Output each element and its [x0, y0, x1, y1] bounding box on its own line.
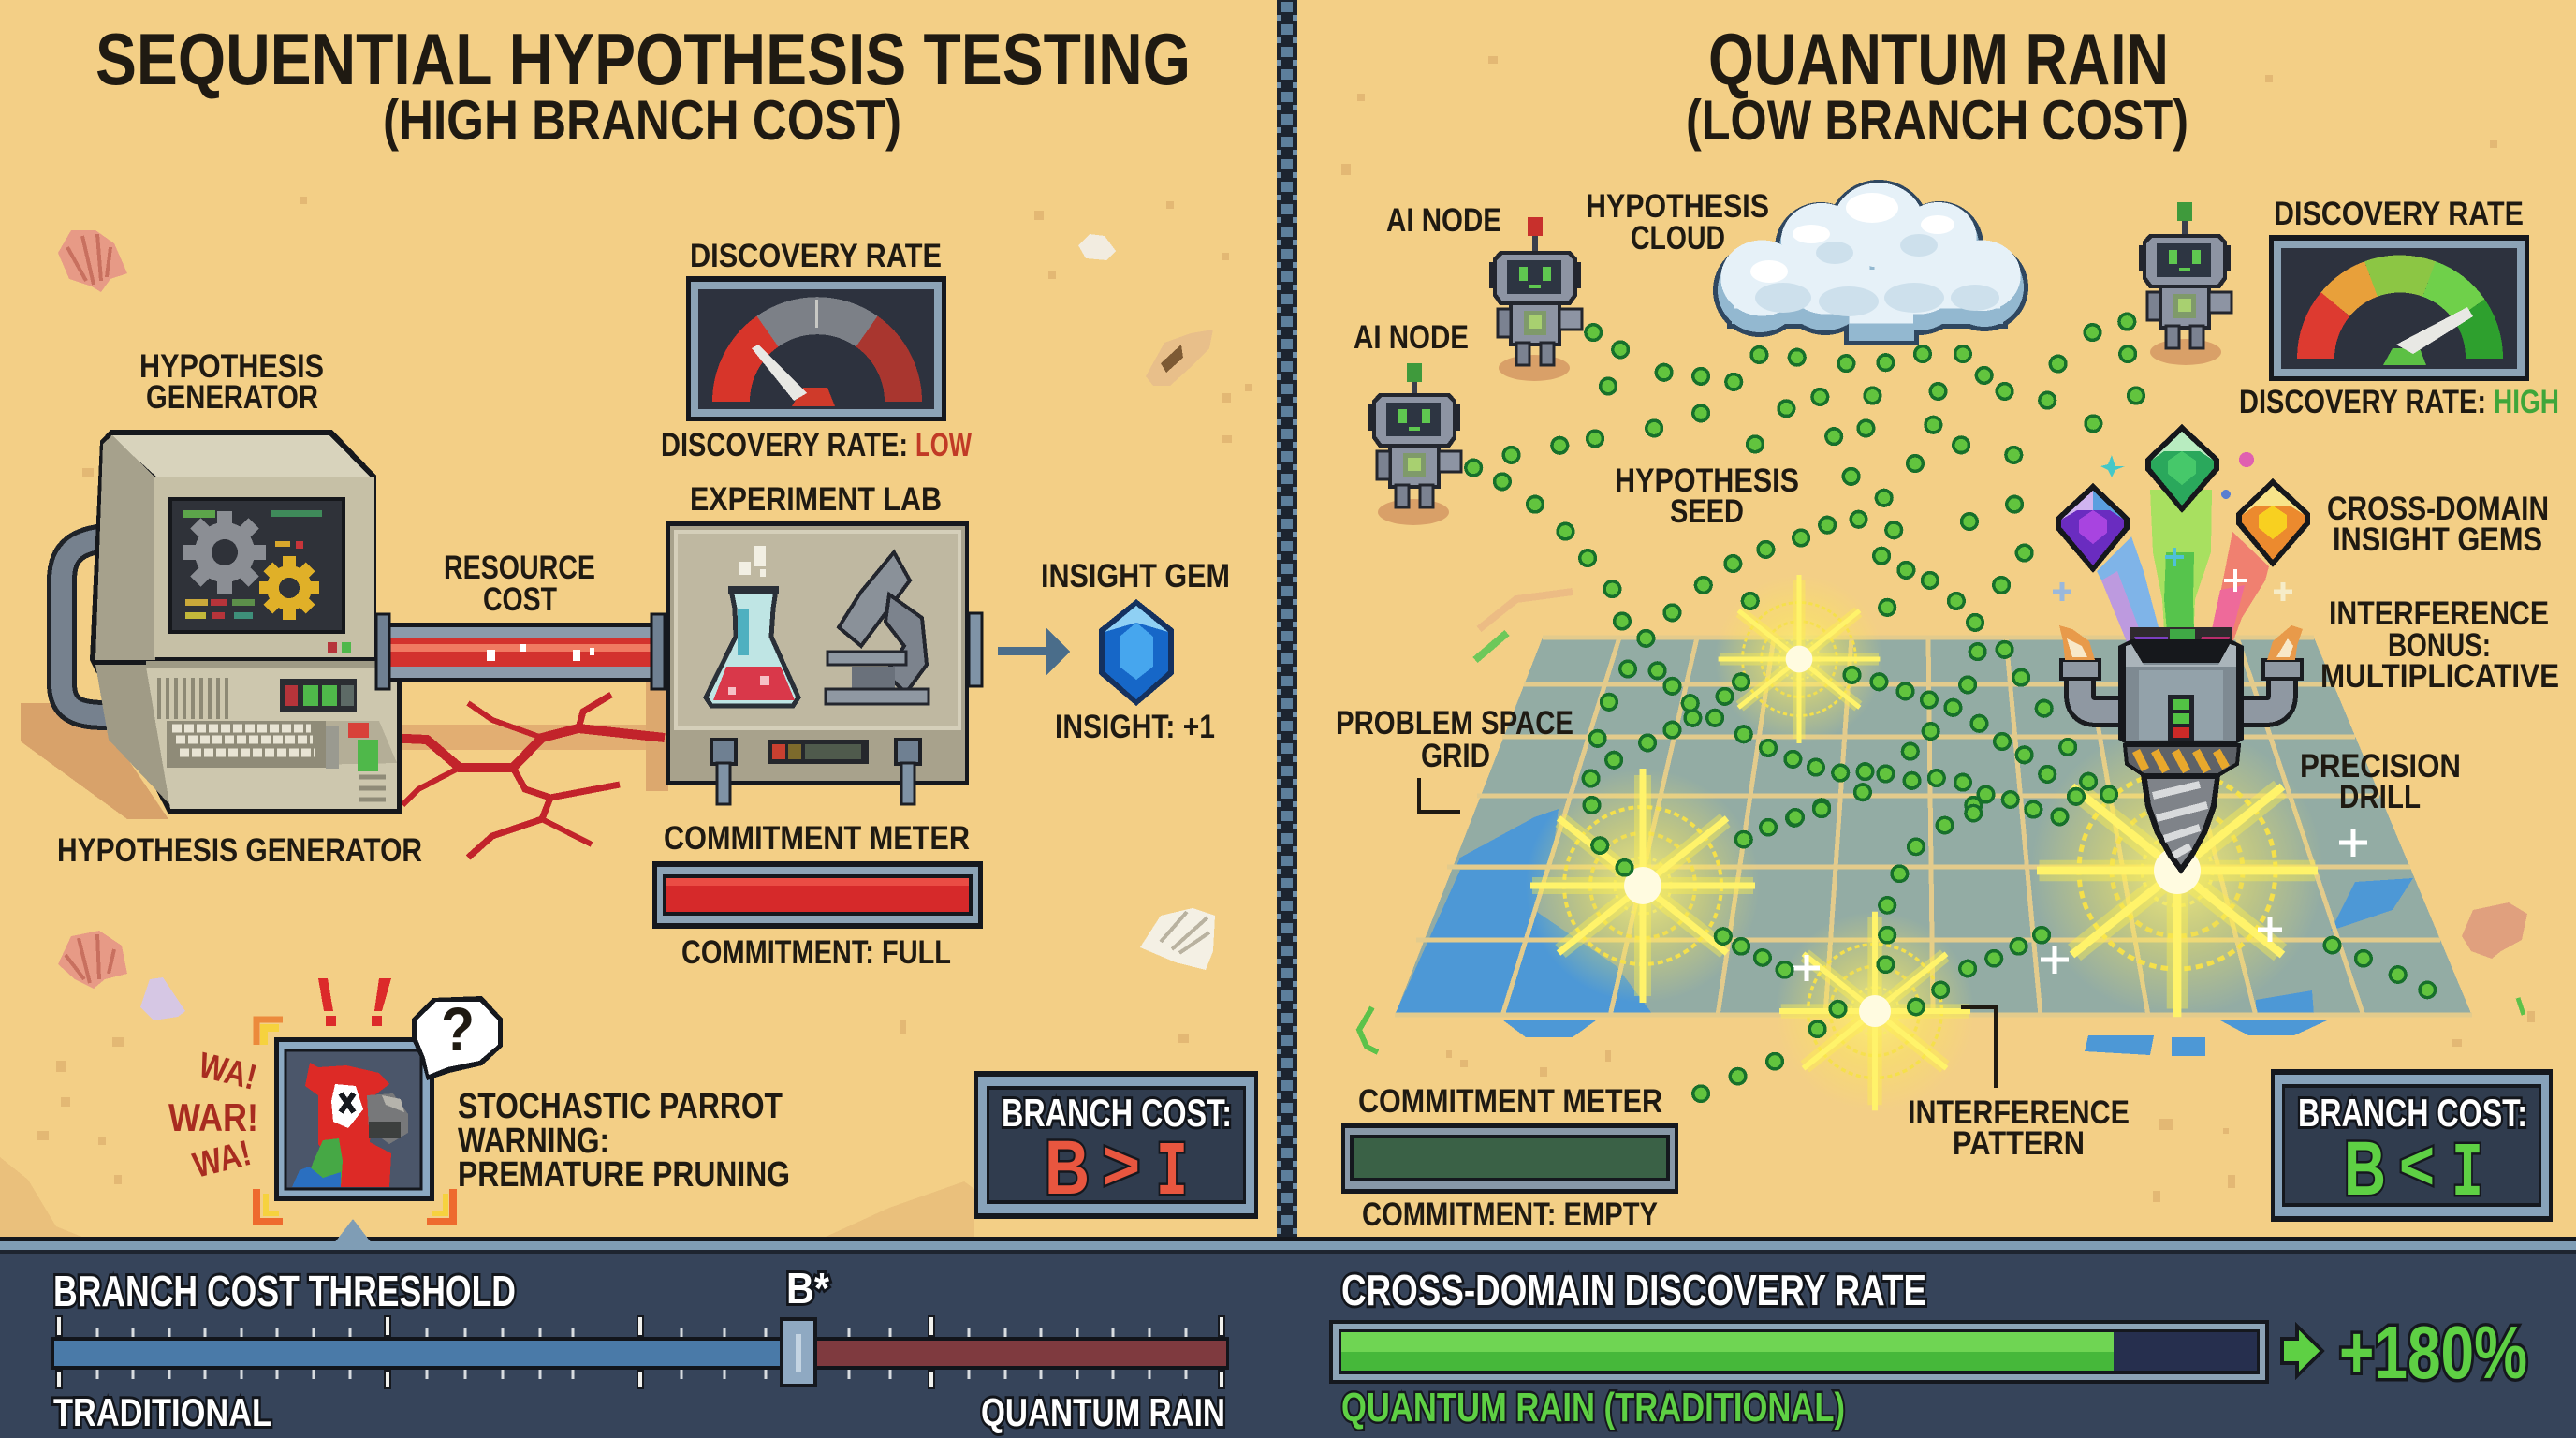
shell: lilac	[140, 977, 185, 1020]
panel: branch cost left: B	[1045, 1125, 1090, 1211]
label: commitment empty: COMMITMENT: EMPTY	[1362, 1196, 1658, 1233]
label: hypothesis seed	[1615, 462, 1799, 530]
panel: branch cost left: BRANCH COST:	[1002, 1091, 1232, 1135]
title: quantum rain	[1686, 18, 2188, 152]
label: hypothesis seed: HYPOTHESIS	[1615, 462, 1799, 499]
speech bubble with question mark	[412, 994, 503, 1080]
label: insight +1: INSIGHT: +1	[1055, 709, 1215, 745]
label: interference pattern: PATTERN	[1953, 1125, 2085, 1162]
sparkle particles around gems	[2053, 452, 2292, 601]
precision drill	[2059, 625, 2303, 874]
label: ai node top: AI NODE	[1386, 202, 1501, 239]
computer base	[90, 660, 402, 814]
light beams from drill to gems	[2097, 490, 2269, 667]
shell: tan spiral	[1146, 330, 1213, 386]
label: discovery rate high: DISCOVERY RATE:	[2239, 384, 2486, 420]
keyboard	[167, 721, 378, 771]
panel: branch cost right: B	[2344, 1126, 2386, 1211]
icon: parrot	[292, 1063, 408, 1187]
computer ground shadow	[21, 679, 668, 819]
label: stochastic parrot warning: PREMATURE PRUNING	[458, 1155, 790, 1195]
grid lines	[1395, 638, 2472, 1016]
gem: cross-domain yellow	[2236, 478, 2310, 567]
icon: flask	[706, 546, 798, 706]
label: hypothesis cloud: HYPOTHESIS	[1586, 188, 1769, 225]
icon: blue insight gem	[1099, 599, 1174, 706]
white sparkle crosses on grid	[1793, 829, 2367, 981]
commitment readout	[768, 740, 869, 764]
minor ticks	[97, 1328, 1186, 1379]
label: discovery rate low: LOW	[915, 427, 972, 463]
label: cross-domain insight gems: INSIGHT GEMS	[2333, 521, 2542, 558]
label: ai node left: AI NODE	[1354, 319, 1469, 356]
label: commitment meter left: COMMITMENT METER	[664, 820, 970, 857]
crack network	[386, 695, 665, 858]
panel: branch cost left: I	[1156, 1130, 1188, 1217]
panel: experiment lab	[666, 521, 982, 804]
slider: branch cost threshold	[51, 1315, 1229, 1389]
label: problem space grid: PROBLEM SPACE	[1336, 705, 1573, 741]
gem: cross-domain green	[2145, 424, 2219, 513]
label: hypothesis generator bottom: HYPOTHESIS GENERATOR	[57, 832, 422, 869]
label: precision drill: DRILL	[2339, 779, 2421, 815]
wa war wa squawks: WA!	[189, 1134, 255, 1186]
robot: ai node left	[1368, 363, 1461, 525]
label: hypothesis seed: SEED	[1670, 493, 1744, 530]
center chain divider	[1277, 0, 1297, 1238]
problem space bracket	[1419, 778, 1460, 812]
wa war wa squawks: WAR!	[168, 1095, 258, 1139]
wa war wa squawks	[168, 1046, 260, 1186]
wa war wa squawks: WA!	[195, 1046, 260, 1098]
resource cost pipe	[376, 614, 665, 689]
drill arms	[2059, 625, 2303, 712]
title: sequential hypothesis testing: SEQUENTIAL HYPOTHESIS TESTING	[95, 18, 1191, 100]
label: branch cost threshold: BRANCH COST THRESHOLD	[53, 1267, 516, 1315]
label: b star: B*	[786, 1264, 829, 1313]
label: traditional: TRADITIONAL	[53, 1390, 271, 1434]
label: precision drill: PRECISION	[2300, 748, 2461, 785]
computer screen	[170, 499, 344, 632]
value: +180%: +180%	[2339, 1311, 2527, 1394]
interference sparkles	[1526, 575, 2323, 1110]
grid water	[1395, 809, 2413, 1056]
label: cross-domain discovery rate: CROSS-DOMAIN DISCOVERY RATE	[1341, 1266, 1926, 1314]
title: sequential hypothesis testing	[95, 18, 1191, 152]
title: quantum rain: QUANTUM RAIN	[1708, 18, 2169, 100]
label: resource cost: COST	[483, 581, 557, 618]
label: stochastic parrot warning	[458, 1087, 790, 1195]
label: discovery rate high: HIGH	[2494, 384, 2559, 420]
commitment meter empty	[1341, 1123, 1678, 1194]
icon: microscope	[826, 552, 929, 704]
panel: bottom status bar	[0, 1219, 2576, 1438]
label: quantum rain traditional: QUANTUM RAIN (TRADITIONAL)	[1341, 1385, 1845, 1431]
label: quantum rain: QUANTUM RAIN	[981, 1390, 1225, 1434]
warning corner brackets	[256, 1020, 453, 1222]
panel: hypothesis generator machine	[62, 430, 402, 814]
label: interference bonus	[2320, 595, 2559, 695]
label: commitment full: COMMITMENT: FULL	[681, 934, 951, 971]
major ticks	[59, 1315, 1222, 1389]
hypothesis seed trails	[1464, 313, 2145, 828]
panel: branch cost left: >	[1103, 1126, 1140, 1204]
label: problem space grid: GRID	[1421, 738, 1490, 774]
label: discovery rate low: DISCOVERY RATE:	[661, 427, 908, 463]
icon: hypothesis cloud	[1718, 183, 2024, 341]
hypothesis seed trails lower	[1590, 800, 2437, 1103]
drill bit	[2141, 775, 2220, 874]
warning exclamations	[318, 978, 391, 1026]
label: insight gem: INSIGHT GEM	[1041, 558, 1230, 594]
lab legs	[711, 740, 920, 804]
label: commitment meter right: COMMITMENT METER	[1358, 1083, 1662, 1120]
icon: grey gear	[183, 511, 266, 594]
label: hypothesis generator top	[139, 348, 324, 416]
label: precision drill	[2300, 748, 2461, 815]
shell: white scallop	[1140, 908, 1215, 970]
label: hypothesis generator top: HYPOTHESIS	[139, 348, 324, 385]
label: discovery rate right: DISCOVERY RATE	[2274, 196, 2524, 232]
panel: branch cost left	[974, 1071, 1258, 1219]
panel: branch cost right: I	[2452, 1131, 2483, 1218]
interference leader line	[1961, 1007, 1996, 1088]
label: stochastic parrot warning: STOCHASTIC PARROT	[458, 1087, 783, 1126]
label: resource cost: RESOURCE	[444, 550, 595, 586]
shell: pink top left	[58, 230, 127, 292]
arrow to insight gem	[998, 628, 1070, 675]
title: quantum rain: (LOW BRANCH COST)	[1686, 89, 2188, 152]
label: interference bonus: BONUS:	[2388, 627, 2491, 664]
robot: ai node right	[2139, 202, 2232, 365]
shell: pink right	[2462, 902, 2527, 959]
slider handle	[780, 1317, 817, 1387]
label: hypothesis cloud: CLOUD	[1631, 220, 1725, 257]
label: interference pattern: INTERFERENCE	[1908, 1094, 2130, 1131]
gem: cross-domain purple	[2056, 483, 2130, 573]
label: hypothesis cloud	[1586, 188, 1769, 257]
icon: yellow gear	[259, 556, 319, 620]
shell: pink lower left	[58, 931, 127, 989]
robot: ai node top	[1489, 217, 1582, 381]
threshold pointer	[334, 1219, 372, 1243]
label: experiment lab: EXPERIMENT LAB	[690, 481, 942, 518]
panel: branch cost right	[2271, 1069, 2553, 1222]
gauge: high discovery rate	[2269, 235, 2529, 381]
icon: coolant pipe	[62, 537, 124, 715]
commitment meter full	[652, 861, 983, 929]
label: resource cost	[444, 550, 595, 618]
shell: white pebble	[1078, 234, 1116, 260]
label: problem space grid	[1336, 705, 1573, 774]
label: hypothesis generator top: GENERATOR	[146, 379, 318, 416]
arrow: increase	[2280, 1322, 2325, 1380]
title: sequential hypothesis testing: (HIGH BRANCH COST)	[383, 89, 901, 152]
bar: cross-domain discovery rate	[1329, 1320, 2269, 1384]
gauge: low discovery rate	[686, 276, 946, 421]
label: cross-domain insight gems	[2327, 491, 2549, 558]
panel: problem space grid	[1395, 638, 2472, 1056]
label: stochastic parrot warning: WARNING:	[458, 1122, 609, 1161]
speech bubble with question mark: ?	[441, 994, 475, 1064]
hazard band	[2125, 745, 2239, 775]
label: discovery rate left: DISCOVERY RATE	[690, 238, 942, 274]
panel: branch cost right: <	[2399, 1126, 2435, 1204]
stray green and tan trails near grid	[1359, 592, 2524, 1052]
label: interference pattern	[1908, 1094, 2130, 1162]
panel: stochastic parrot portrait	[274, 1037, 434, 1201]
